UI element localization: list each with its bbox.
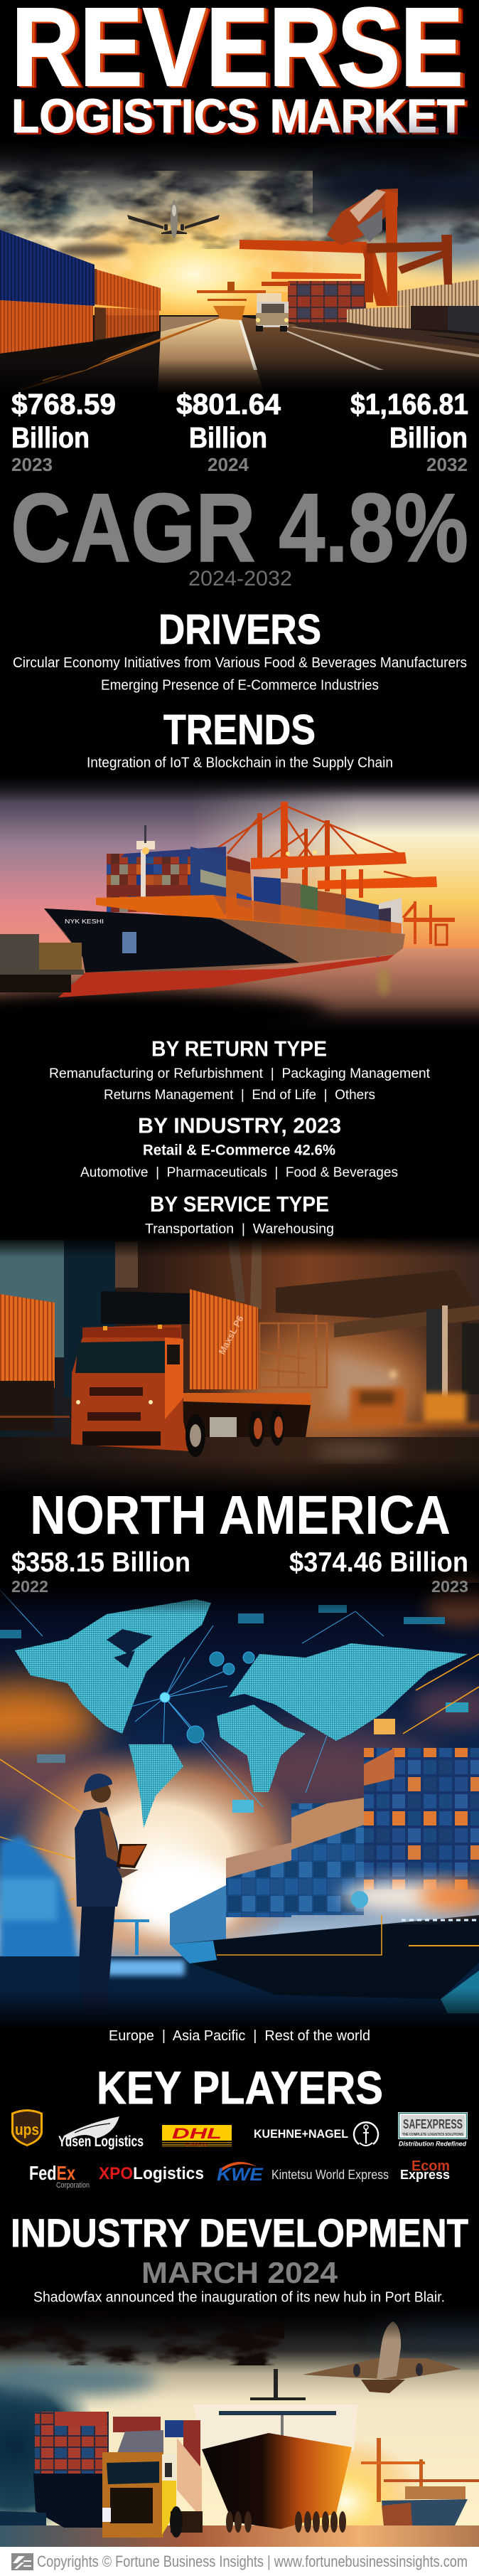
industry development: MARCH 2024 — [141, 2256, 338, 2289]
stat: 2024: $801.64 — [176, 388, 281, 420]
segment: by return type: BY RETURN TYPE — [151, 1036, 327, 1061]
photo: truck, ship and airplane multimodal transport — [0, 2313, 479, 2547]
logo: Kintetsu World Express: Kintetsu World Express — [271, 2168, 389, 2182]
orange data lines — [0, 1654, 479, 1984]
drivers: DRIVERS — [158, 606, 321, 653]
stat: 2024 — [176, 388, 281, 475]
region values — [11, 1547, 468, 1596]
photo: trucks at port warehouse — [0, 1236, 479, 1494]
tires — [226, 2511, 346, 2533]
distant ship and crane — [197, 282, 266, 320]
ship hull: NYK KESHI — [65, 918, 104, 925]
far trucks — [313, 1371, 479, 1429]
water — [0, 948, 479, 1034]
ship hull — [44, 895, 405, 997]
gantry cranes — [239, 189, 452, 306]
segment: by industry: Automotive | Pharmaceuticals | Food & Beverages — [80, 1165, 398, 1180]
drivers — [13, 606, 467, 693]
logo: Safexpress: THE COMPLETE LOGISTICS SOLUTIONS — [402, 2133, 464, 2137]
port city left — [0, 1835, 149, 1971]
airplane — [127, 200, 220, 238]
main truck: MaxsL P6 — [216, 1314, 246, 1356]
containers left — [0, 230, 161, 388]
wheels — [185, 1414, 205, 1457]
key players heading: KEY PLAYERS — [97, 2062, 383, 2114]
stat: 2032 — [350, 388, 468, 475]
value 2023: 2023 — [431, 1577, 468, 1596]
logo: DHL: EXPRESS — [185, 2143, 208, 2147]
stat: 2023 — [11, 388, 116, 475]
CAGR: 2024-2032 — [188, 567, 292, 590]
ship bridge mast — [136, 825, 155, 908]
stat: 2024: Billion — [189, 421, 267, 454]
logo: FedEx — [29, 2162, 90, 2190]
stat: 2023: $768.59 — [11, 388, 116, 420]
stat: 2023: Billion — [11, 421, 90, 454]
logo: Yusen Logistics: Yusen Logistics — [58, 2134, 144, 2150]
logo: UPS — [11, 2109, 43, 2146]
rack — [259, 1315, 327, 1387]
container trailer left — [0, 1294, 70, 1431]
segment: by industry: Retail & E-Commerce 42.6% — [143, 1143, 335, 1158]
trends — [87, 706, 393, 771]
logo: Safexpress — [398, 2112, 468, 2148]
stat: 2024: 2024 — [208, 454, 249, 475]
airplane — [303, 2321, 461, 2393]
segment: by return type: Returns Management | End of Life | Others — [104, 1088, 375, 1103]
ground and road — [0, 315, 479, 393]
photo: container ship at port — [0, 774, 479, 1038]
logo: UPS: ups — [15, 2121, 39, 2138]
big cranes — [214, 802, 437, 898]
logo: Yusen Logistics — [58, 2116, 144, 2150]
stat: 2023: 2023 — [11, 454, 53, 475]
logo: DHL: DHL — [172, 2126, 222, 2142]
industry development — [11, 2210, 468, 2305]
value 2022: $358.15 Billion — [11, 1547, 190, 1578]
value 2022 — [11, 1547, 190, 1596]
delivery truck on road — [256, 293, 289, 332]
flatbed — [183, 1393, 311, 1419]
dock left — [0, 934, 84, 992]
logo: DHL — [162, 2125, 232, 2147]
footer — [0, 2547, 479, 2576]
sea — [0, 1956, 479, 2028]
value 2022: 2022 — [11, 1577, 48, 1596]
value 2023: $374.46 Billion — [289, 1547, 468, 1578]
far crane right — [402, 901, 455, 945]
man with laptop — [75, 1774, 147, 2013]
key player logos — [11, 2109, 468, 2190]
clouds — [0, 1583, 479, 1971]
logo: Ecom Express — [400, 2158, 450, 2182]
segment: by return type: Remanufacturing or Refurbishment | Packaging Management — [49, 1066, 431, 1081]
segment: by industry: BY INDUSTRY, 2023 — [138, 1113, 341, 1138]
network lines — [0, 1590, 468, 1813]
cab — [71, 1325, 190, 1451]
drivers: Circular Economy Initiatives from Various Food & Beverages Manufacturers — [13, 655, 467, 671]
overhead beams — [227, 1238, 479, 1444]
logo: Kuehne + Nagel — [254, 2122, 378, 2146]
segment: by service type: Transportation | Warehousing — [145, 1222, 334, 1236]
other regions: Europe | Asia Pacific | Rest of the world — [109, 2028, 370, 2044]
ship hull — [202, 2433, 352, 2529]
main truck — [71, 1289, 327, 1457]
ground — [0, 1437, 479, 1494]
title — [11, 0, 468, 144]
stats row — [11, 388, 468, 475]
title line: LOGISTICS MARKET: LOGISTICS MARKET — [14, 91, 468, 144]
stacked containers behind truck — [288, 280, 479, 349]
logo: Ecom Express: Express — [400, 2168, 450, 2182]
industry development: Shadowfax announced the inauguration of its new hub in Port Blair. — [33, 2289, 445, 2305]
dotted continents — [15, 1599, 468, 1828]
segment: by service type — [145, 1192, 334, 1236]
logo: Kuehne + Nagel: KUEHNE+NAGEL — [254, 2127, 348, 2141]
segment: by industry — [80, 1113, 398, 1180]
trends: Integration of IoT & Blockchain in the Supply Chain — [87, 756, 393, 771]
title line: LOGISTICS MARKET: LOGISTICS MARKET — [11, 90, 465, 143]
stat: 2032: 2032 — [426, 454, 468, 475]
segment: by service type: BY SERVICE TYPE — [150, 1192, 329, 1217]
stat: 2032: $1,166.81 — [350, 388, 468, 420]
logo: Ecom Express: Ecom — [411, 2158, 450, 2174]
logo: Safexpress: Distribution Redefined — [399, 2140, 466, 2148]
trends: TRENDS — [163, 706, 316, 753]
logo: FedEx: FedEx — [29, 2162, 75, 2184]
right port crane and ship — [0, 2438, 479, 2525]
value 2023 — [289, 1547, 468, 1596]
segment: by return type — [49, 1036, 431, 1103]
logo: XPO Logistics: XPOLogistics — [99, 2164, 204, 2183]
photo: world map, manager and container ship — [0, 1583, 479, 2031]
photo: airplane, containers and port at sunset — [0, 139, 479, 393]
drivers: Emerging Presence of E-Commerce Industries — [101, 677, 379, 693]
reflection — [377, 968, 390, 996]
stat: 2032: Billion — [389, 421, 468, 454]
logo: FedEx: Corporation — [56, 2181, 90, 2190]
container ship — [170, 1748, 479, 1999]
container stacks — [107, 847, 403, 957]
container stack — [33, 2412, 200, 2528]
photo fades — [0, 139, 479, 181]
logo: KWE: KWE — [217, 2165, 264, 2185]
yellow truck — [102, 2430, 203, 2538]
ship superstructure — [193, 2369, 357, 2451]
ground — [0, 2525, 479, 2547]
icon: Fortune Business Insights logo — [11, 2553, 33, 2570]
